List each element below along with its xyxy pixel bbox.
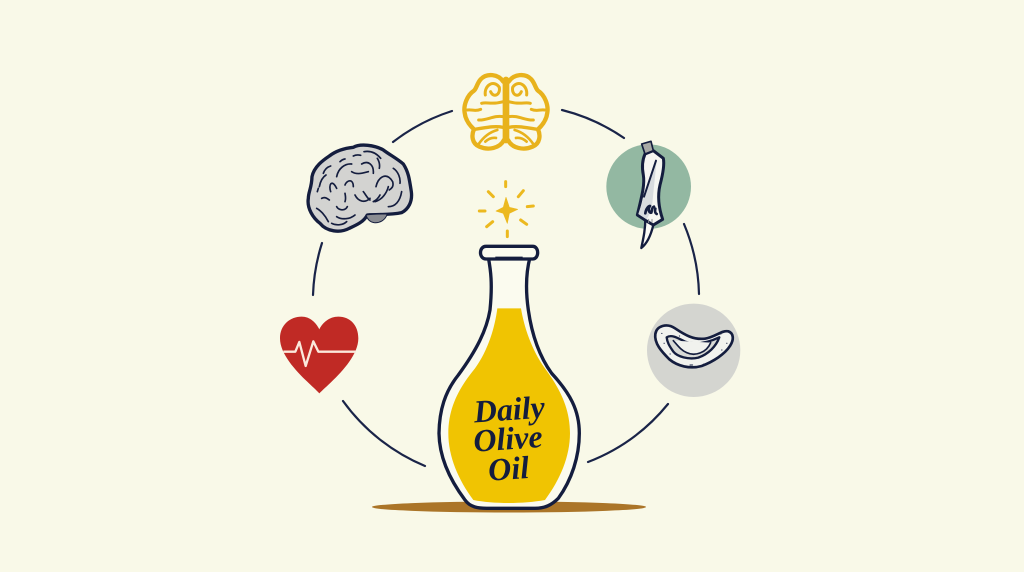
brain stem shading — [366, 214, 387, 223]
sparkle star — [496, 197, 518, 223]
olive oil bottle — [439, 246, 579, 508]
bottle label text: Daily — [472, 389, 547, 430]
sparkle above bottle — [479, 182, 533, 237]
oil fill — [448, 308, 570, 503]
brain folds — [317, 151, 402, 225]
bottle label text — [472, 389, 547, 488]
icon: golden brain — [464, 75, 548, 149]
ground shadow — [372, 502, 646, 512]
icon: grey anatomical brain — [308, 145, 412, 231]
bottle lip — [480, 246, 538, 259]
sparkle rays — [479, 182, 533, 237]
bottle glass — [439, 257, 579, 508]
pulse line — [283, 341, 356, 366]
bottle label text: Olive — [472, 418, 544, 459]
circular connector arcs — [313, 110, 699, 466]
neck line — [495, 255, 523, 261]
bone shading — [638, 161, 657, 219]
icon: green circle with bone shape — [606, 141, 691, 248]
bone tip — [642, 141, 653, 154]
bottle label text: Oil — [487, 449, 530, 488]
bone markings — [644, 161, 656, 197]
lower spike — [641, 218, 653, 248]
icon: grey circle with joint cross-section — [647, 304, 740, 397]
icon: heart with pulse line — [280, 317, 358, 393]
joint dots — [662, 333, 727, 365]
bone body — [637, 151, 664, 225]
